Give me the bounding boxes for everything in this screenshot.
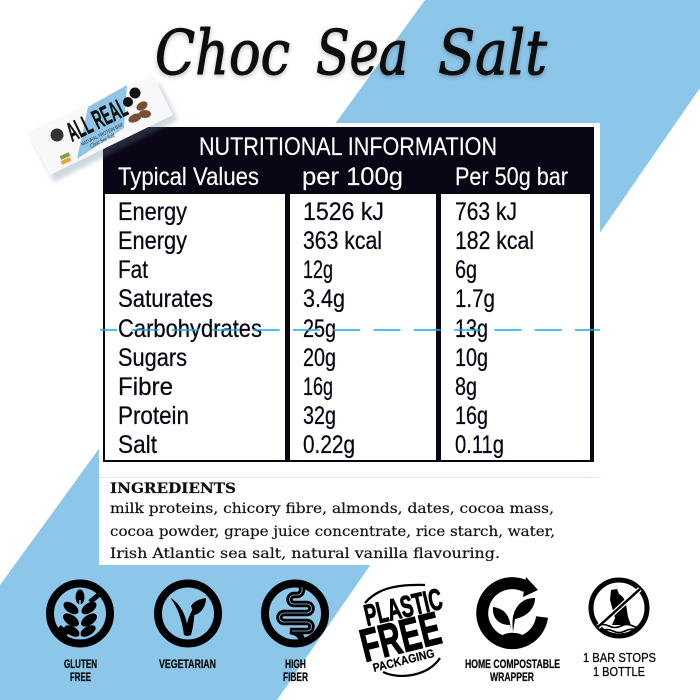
- per 100g values: 1526 kJ: [303, 198, 384, 226]
- ingredients text: [110, 501, 555, 562]
- label: gluten free: FREE: [70, 672, 91, 684]
- bar protein badges: [123, 88, 140, 107]
- label: gluten free: [64, 659, 97, 684]
- per 50g bar values: 13g: [455, 315, 488, 343]
- title: Sea: [316, 16, 408, 89]
- per 50g bar values: 8g: [455, 373, 477, 401]
- label: high fiber: [283, 659, 309, 684]
- icon: plastic free packaging: [355, 583, 446, 676]
- table row labels: [118, 198, 262, 459]
- table column: per 100g: [290, 194, 436, 460]
- per 50g bar values: 0.11g: [455, 431, 504, 459]
- per 50g bar values: [455, 198, 534, 459]
- label: high fiber: FIBER: [283, 672, 309, 684]
- table column: labels: [105, 194, 285, 460]
- per 100g values: 3.4g: [303, 285, 345, 313]
- icon: vegetarian: [158, 584, 218, 671]
- per 100g values: 363 kcal: [303, 227, 382, 255]
- table column headers: Typical Values: [118, 163, 259, 191]
- panel: nutrition table: [99, 123, 600, 477]
- ingredients text: cocoa powder, grape juice concentrate, rice starch, water,: [110, 524, 555, 540]
- label: 1 bar stops 1 bottle: 1 BAR STOPS: [583, 650, 656, 665]
- table row labels: Saturates: [118, 285, 213, 313]
- icon: home compostable wrapper: [465, 577, 560, 684]
- label: vegetarian: VEGETARIAN: [159, 659, 216, 671]
- per 50g bar values: 182 kcal: [455, 227, 534, 255]
- table column headers: per 100g: [302, 163, 403, 191]
- table row labels: Carbohydrates: [118, 315, 262, 343]
- dashed cut line: [100, 329, 600, 331]
- table column headers: Per 50g bar: [455, 163, 568, 191]
- label: high fiber: HIGH: [285, 659, 306, 671]
- ingredients heading: INGREDIENTS: [110, 481, 236, 497]
- per 100g values: 20g: [303, 344, 336, 372]
- icon: plastic free packaging: FREE: [355, 602, 446, 672]
- per 50g bar values: 10g: [455, 344, 488, 372]
- icon: bar stops bottle: [583, 580, 656, 679]
- per 50g bar values: 763 kJ: [455, 198, 517, 226]
- per 100g values: 0.22g: [303, 431, 355, 459]
- bar logos: [60, 152, 71, 165]
- table row labels: Energy: [118, 198, 187, 226]
- ingredients text: Irish Atlantic sea salt, natural vanilla flavouring.: [110, 546, 500, 562]
- title: [155, 16, 547, 89]
- title: Choc: [155, 16, 290, 89]
- icon: gluten free: [50, 584, 110, 684]
- table column headers: [118, 163, 568, 191]
- per 50g bar values: 1.7g: [455, 285, 495, 313]
- table column: per 50g bar: [441, 194, 590, 460]
- per 100g values: 32g: [303, 402, 336, 430]
- per 100g values: 16g: [303, 373, 333, 401]
- bar wordmark: ALL REAL: [61, 92, 132, 147]
- table row labels: Protein: [118, 402, 189, 430]
- label: gluten free: GLUTEN: [64, 659, 97, 671]
- table row labels: Energy: [118, 227, 187, 255]
- bar chocolate pieces: [127, 100, 151, 125]
- title: Salt: [438, 16, 547, 89]
- per 100g values: 12g: [303, 256, 333, 284]
- icon: high fiber: [265, 584, 325, 684]
- label: 1 bar stops 1 bottle: [583, 650, 656, 679]
- per 100g values: [303, 198, 384, 459]
- label: home compostable wrapper: HOME COMPOSTABLE: [465, 659, 560, 671]
- per 100g values: 25g: [303, 315, 336, 343]
- panel: ingredients: [99, 477, 600, 565]
- icon: plastic free packaging: PACKAGING: [371, 646, 436, 675]
- bar flavour: Choc Sea Salt: [89, 132, 116, 150]
- product: protein bar wrapper: [27, 75, 178, 182]
- per 50g bar values: 6g: [455, 256, 477, 284]
- table row labels: Salt: [118, 431, 157, 459]
- label: 1 bar stops 1 bottle: 1 BOTTLE: [593, 664, 645, 679]
- per 50g bar values: 16g: [455, 402, 488, 430]
- table heading: NUTRITIONAL INFORMATION: [199, 133, 497, 161]
- icon: plastic free packaging: PLASTIC: [361, 583, 446, 633]
- table row labels: Fat: [118, 256, 148, 284]
- ingredients text: milk proteins, chicory fibre, almonds, dates, cocoa mass,: [110, 501, 554, 517]
- table row labels: Sugars: [118, 344, 187, 372]
- label: home compostable wrapper: [465, 659, 560, 684]
- bar subtitle: NATURAL PROTEIN BAR: [80, 122, 124, 148]
- label: home compostable wrapper: WRAPPER: [490, 672, 535, 684]
- table row labels: Fibre: [118, 373, 173, 401]
- bar badge: [50, 128, 64, 142]
